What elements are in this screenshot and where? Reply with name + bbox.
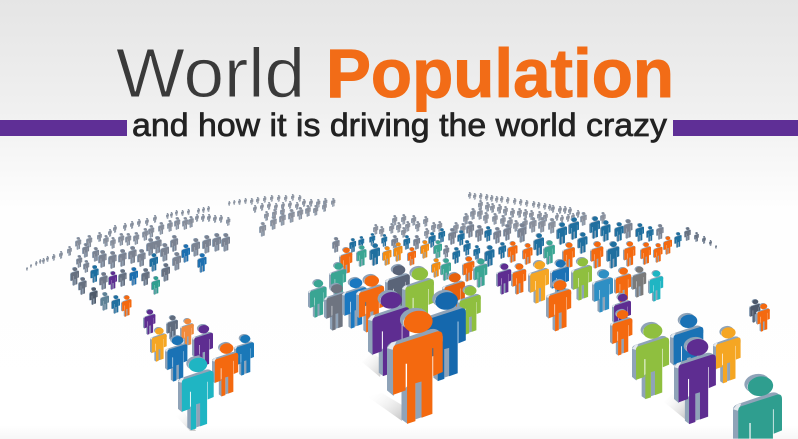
world map made of people [26, 192, 782, 439]
region: Asia and Europe middle rows [332, 216, 717, 331]
yellow figure [713, 325, 741, 383]
blue figure [165, 334, 187, 382]
title: Population [326, 35, 674, 112]
orange figure island [756, 302, 770, 332]
foot shadow [362, 352, 384, 377]
light green figure [457, 284, 481, 335]
mid grey crowd [76, 233, 230, 273]
grey figure island [749, 299, 760, 323]
light orange figure [180, 317, 194, 347]
dark orange figure [442, 271, 465, 320]
large orange figure [387, 306, 443, 424]
region: South America [143, 308, 254, 431]
cyan figure [178, 354, 214, 430]
teal figure [308, 278, 327, 318]
region: Russia and Asia far rows [373, 192, 606, 239]
left purple bar [0, 120, 127, 136]
orange figure [356, 273, 384, 332]
foot shadow [176, 412, 196, 431]
yellow figure [150, 326, 167, 362]
grey figure [324, 282, 347, 331]
purple figure [612, 292, 631, 333]
title [116, 34, 674, 112]
purple figure [143, 308, 155, 335]
grey figure [385, 263, 410, 316]
grey crowd [26, 206, 230, 271]
region: Africa and Europe [308, 261, 481, 424]
coloured crowd [70, 244, 206, 317]
foot shadow [664, 394, 686, 420]
green figure [402, 265, 434, 332]
teal large figure, cut off by the frame [733, 372, 782, 439]
purple figure [368, 288, 409, 376]
purple figure [192, 323, 213, 368]
right purple bar [673, 120, 798, 136]
grey figure [166, 314, 178, 340]
region: South East Asia and Oceania [610, 292, 782, 439]
foot shadow [368, 393, 402, 421]
blue figure [342, 276, 367, 329]
blue figure [422, 288, 466, 381]
purple figure [674, 335, 716, 424]
green figure [632, 320, 669, 399]
orange figure [610, 308, 632, 356]
title: World [116, 34, 305, 112]
subtitle: and how it is driving the world crazy [132, 107, 667, 143]
orange figure [212, 341, 238, 396]
blue figure [670, 312, 703, 382]
blue figure [234, 333, 254, 376]
teal figure [329, 261, 346, 298]
region: Greenland [228, 194, 335, 237]
region: North America [26, 206, 230, 317]
